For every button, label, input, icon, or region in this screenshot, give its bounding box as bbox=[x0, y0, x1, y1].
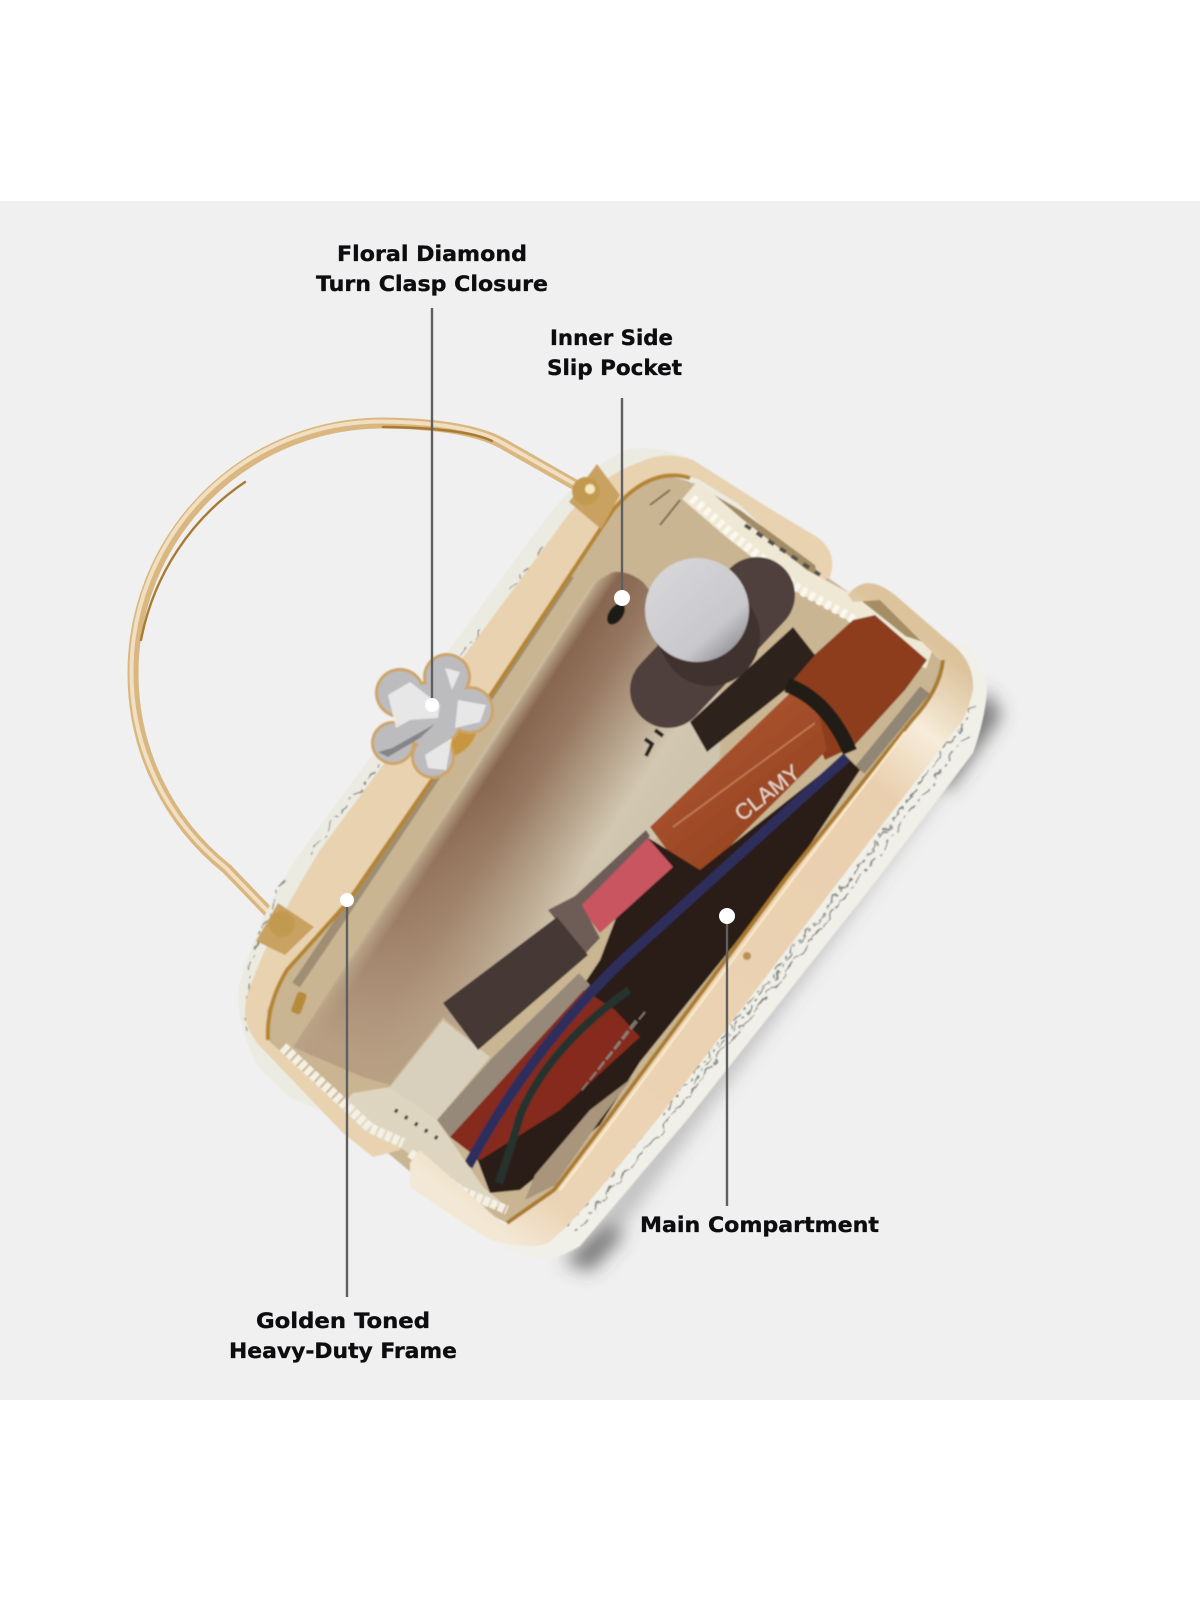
lipstick black band bbox=[787, 685, 850, 752]
callout: main compartment bbox=[640, 908, 879, 1237]
handle bbox=[131, 422, 586, 924]
callout: inner side slip pocket bbox=[547, 326, 682, 606]
front frame band bbox=[410, 583, 973, 1246]
bottom ruffle fabric bbox=[283, 1047, 507, 1210]
back shell bbox=[238, 448, 800, 1110]
floral diamond clasp bbox=[371, 653, 494, 779]
side clasp bbox=[291, 991, 307, 1015]
marker dot bbox=[425, 698, 439, 712]
callout label: Slip Pocket bbox=[547, 356, 682, 380]
hinge bracket bbox=[256, 903, 314, 955]
cream fabric at bottom bbox=[340, 1087, 507, 1207]
clutch bag bbox=[238, 448, 987, 1260]
brand text: CLAMY bbox=[730, 759, 805, 826]
front shell bbox=[480, 640, 987, 1260]
phone logo bbox=[645, 730, 663, 756]
front rim highlight bbox=[560, 732, 905, 1190]
gem light facets bbox=[388, 668, 486, 770]
interior base bbox=[267, 477, 943, 1223]
marker dot bbox=[340, 893, 354, 907]
leader line bbox=[726, 916, 728, 1206]
gold setting bbox=[371, 653, 494, 779]
callout label: Inner Side bbox=[550, 326, 673, 350]
lipstick highlight bbox=[673, 723, 815, 827]
callout label: Turn Clasp Closure bbox=[316, 272, 548, 296]
hinge bracket bbox=[569, 464, 620, 529]
beige strip near rim bbox=[525, 1078, 632, 1200]
dark gap along back rim bbox=[296, 575, 570, 985]
back cap inner wall bbox=[692, 482, 818, 578]
callout label: Floral Diamond bbox=[337, 242, 527, 266]
hinge ball bbox=[269, 911, 295, 937]
leader line bbox=[621, 398, 623, 598]
perfume neck bbox=[697, 612, 710, 636]
phone lower fade bbox=[293, 572, 720, 1085]
red item bbox=[450, 990, 640, 1160]
frame stud bbox=[743, 952, 751, 960]
leader line bbox=[346, 900, 348, 1297]
callout label: Heavy-Duty Frame bbox=[229, 1339, 457, 1363]
marker dot bbox=[719, 908, 735, 924]
perfume cap bbox=[645, 558, 749, 662]
back gold rim bbox=[268, 475, 690, 1040]
gem dark facets bbox=[378, 724, 435, 757]
perfume body bbox=[668, 595, 757, 690]
hinge ball bbox=[572, 477, 600, 505]
perfume shadow bbox=[690, 627, 815, 752]
dark rectangular lipstick bbox=[443, 917, 588, 1050]
cream lower interior bbox=[390, 1020, 490, 1120]
phone bbox=[293, 572, 720, 1085]
gemstone bbox=[374, 656, 491, 776]
camera lens bbox=[603, 600, 629, 628]
front cap inner wall bbox=[853, 597, 928, 650]
leader line bbox=[431, 308, 433, 705]
callout label: Golden Toned bbox=[256, 1309, 430, 1333]
hinge highlight bbox=[585, 484, 595, 494]
front gold rim bbox=[507, 660, 943, 1223]
shadow beneath bag bbox=[562, 690, 1002, 1272]
phone top detail bbox=[585, 490, 680, 548]
callout: golden toned heavy-duty frame bbox=[229, 893, 457, 1363]
back frame band bbox=[245, 455, 832, 1157]
grey background band bbox=[0, 201, 1200, 1400]
callout: floral diamond turn clasp closure bbox=[316, 242, 548, 712]
compartment stripes bbox=[582, 1012, 645, 1090]
callout label: Main Compartment bbox=[640, 1213, 879, 1237]
lower orange lipstick cap bbox=[790, 615, 927, 760]
pink gloss bbox=[577, 837, 673, 933]
upper hinge bbox=[569, 464, 620, 529]
orange lipstick bbox=[650, 693, 827, 873]
lower hinge bbox=[256, 903, 314, 1015]
gold mount shadow bbox=[406, 686, 478, 758]
grey strip near rim bbox=[860, 690, 925, 770]
dark compartment contents bbox=[470, 755, 860, 1193]
blue band bbox=[468, 757, 847, 1166]
shell crackle texture bbox=[246, 480, 975, 1235]
tan strip bbox=[437, 973, 590, 1137]
dark cable bbox=[499, 990, 629, 1183]
gloss tube bbox=[548, 830, 650, 955]
marker dot bbox=[614, 590, 630, 606]
top ruffle fabric bbox=[690, 490, 930, 664]
